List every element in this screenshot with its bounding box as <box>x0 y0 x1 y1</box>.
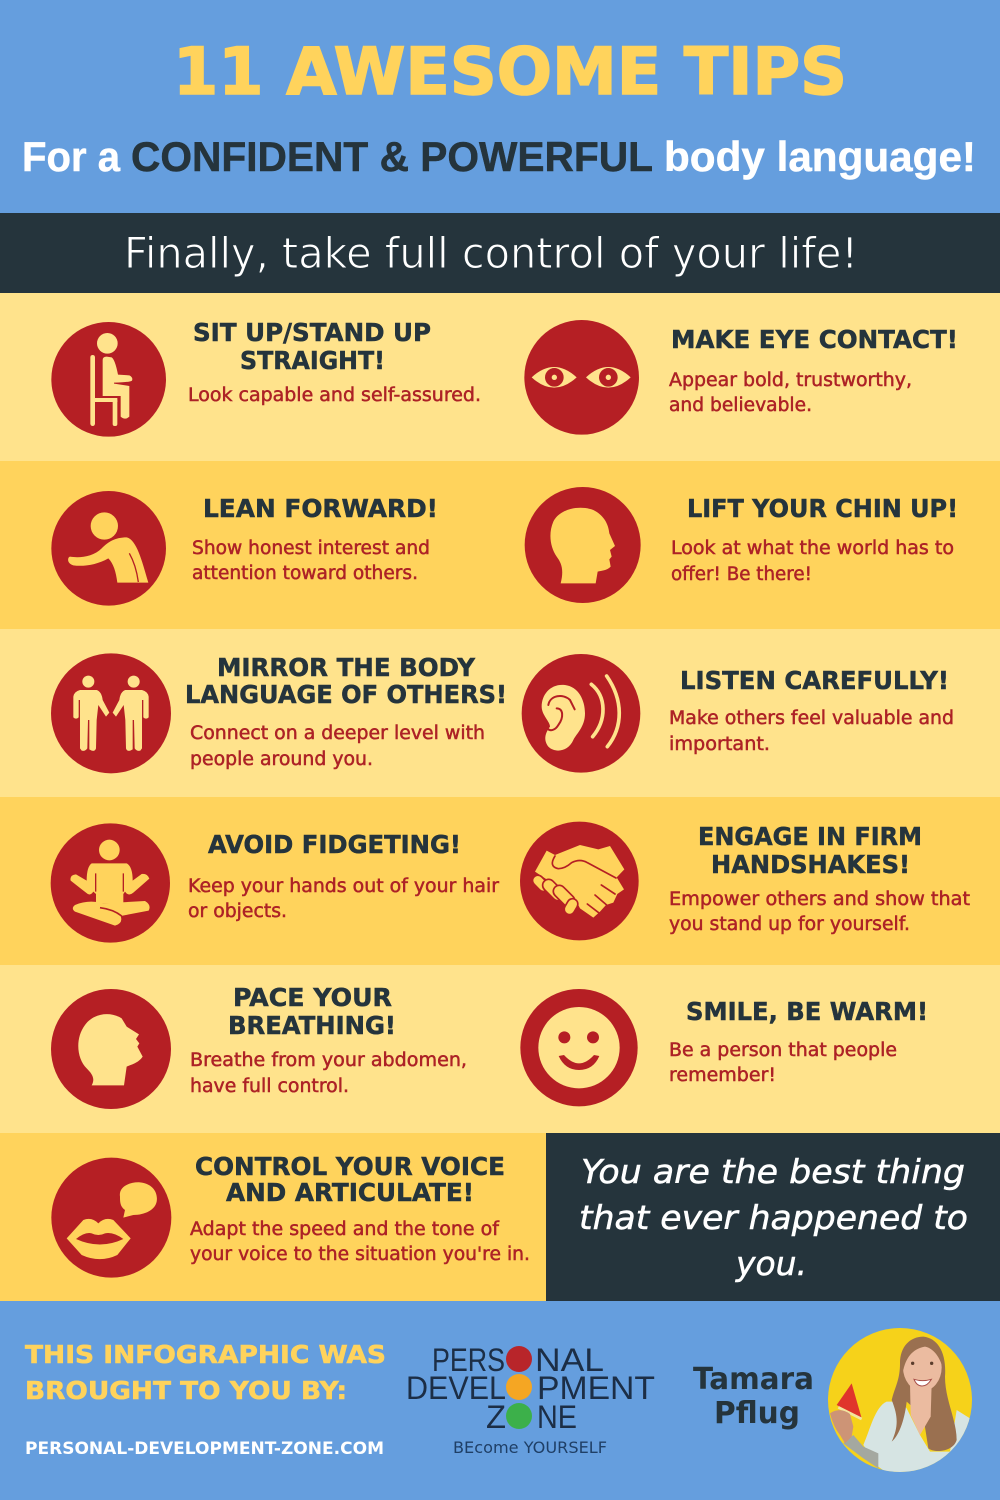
logo: personal development zone: NAL <box>535 1342 604 1378</box>
footer credit: BROUGHT TO YOU BY: <box>25 1376 347 1405</box>
heading: AND ARTICULATE! <box>226 1178 474 1207</box>
text: Be a person that people <box>669 1040 897 1061</box>
text: and believable. <box>669 395 812 416</box>
icon: handshake <box>520 822 639 940</box>
text: offer! Be there! <box>671 564 812 585</box>
text: Adapt the speed and the tone of <box>190 1219 499 1240</box>
text <box>671 538 954 585</box>
icon: lips and speech bubble <box>51 1158 171 1278</box>
heading: LANGUAGE OF OTHERS! <box>185 680 507 709</box>
heading <box>195 1152 505 1207</box>
text: Show honest interest and <box>192 538 430 559</box>
subtitle <box>22 133 976 180</box>
text <box>669 370 912 416</box>
logo: personal development zone <box>406 1342 655 1457</box>
text <box>188 876 499 922</box>
heading: PACE YOUR <box>233 983 392 1012</box>
text: your voice to the situation you're in. <box>190 1244 530 1265</box>
heading: CONTROL YOUR VOICE <box>195 1152 505 1181</box>
heading: MAKE EYE CONTACT! <box>671 325 958 354</box>
tip: avoid fidgeting <box>51 823 499 943</box>
heading: MIRROR THE BODY <box>217 653 476 682</box>
text: Breathe from your abdomen, <box>190 1050 467 1071</box>
title: 11 AWESOME TIPS <box>173 35 847 110</box>
heading: HANDSHAKES! <box>711 850 910 879</box>
text: Connect on a deeper level with <box>190 723 485 744</box>
subtitle: CONFIDENT & POWERFUL <box>131 133 653 180</box>
author name <box>693 1362 814 1431</box>
text <box>190 1050 467 1097</box>
heading: LISTEN CAREFULLY! <box>680 666 949 695</box>
text: Empower others and show that <box>669 889 970 910</box>
text: Appear bold, trustworthy, <box>669 370 912 391</box>
icon: head tilted up <box>51 989 171 1109</box>
tip: firm handshakes <box>520 822 970 940</box>
logo: personal development zone: DEVEL <box>406 1370 506 1406</box>
icon: head profile <box>525 487 641 603</box>
tip: lean forward <box>51 491 438 606</box>
text: Keep your hands out of your hair <box>188 876 499 897</box>
heading: LIFT YOUR CHIN UP! <box>687 494 958 523</box>
portrait <box>827 1327 973 1477</box>
text <box>669 1040 897 1086</box>
logo: personal development zone: Z <box>486 1399 506 1435</box>
text <box>669 708 954 755</box>
tip: lift chin <box>525 487 958 603</box>
heading <box>193 318 431 375</box>
tip: pace breathing <box>51 983 467 1109</box>
tip: smile <box>520 989 928 1106</box>
text: attention toward others. <box>192 563 418 584</box>
tip: eye contact <box>524 320 958 435</box>
text <box>192 538 430 584</box>
text: or objects. <box>188 901 287 922</box>
banner: Finally, take full control of your life! <box>124 229 858 279</box>
text: Look at what the world has to <box>671 538 954 559</box>
logo: personal development zone: PERS <box>432 1342 505 1378</box>
heading: BREATHING! <box>228 1011 396 1040</box>
text <box>190 1219 530 1265</box>
author name: Tamara <box>693 1362 814 1397</box>
text <box>190 723 485 770</box>
icon: seated person <box>51 322 166 437</box>
text <box>669 889 970 935</box>
text: have full control. <box>190 1076 349 1097</box>
banner <box>0 213 1000 293</box>
heading <box>185 653 507 709</box>
text: people around you. <box>190 749 373 770</box>
text: Make others feel valuable and <box>669 708 954 729</box>
subtitle: For a <box>22 133 121 180</box>
tip: control voice <box>51 1152 530 1278</box>
icon: ear <box>522 654 640 773</box>
author name: Pflug <box>714 1396 800 1431</box>
icon: meditating person <box>51 823 170 943</box>
heading: SMILE, BE WARM! <box>686 997 928 1026</box>
heading: STRAIGHT! <box>240 346 385 375</box>
website url: PERSONAL-DEVELOPMENT-ZONE.COM <box>25 1439 384 1458</box>
subtitle: body language! <box>664 133 976 180</box>
text: remember! <box>669 1065 776 1086</box>
text: you stand up for yourself. <box>669 914 910 935</box>
logo: personal development zone: NE <box>537 1399 577 1435</box>
text: important. <box>669 734 770 755</box>
quote panel: You are the best thing <box>581 1152 965 1191</box>
heading: LEAN FORWARD! <box>203 494 438 523</box>
quote panel: that ever happened to <box>579 1198 968 1237</box>
footer credit: THIS INFOGRAPHIC WAS <box>25 1340 386 1369</box>
tip: sit up straight <box>51 318 481 437</box>
heading: AVOID FIDGETING! <box>208 830 461 859</box>
heading <box>698 822 922 879</box>
heading: ENGAGE IN FIRM <box>698 822 922 851</box>
footer credit <box>25 1340 386 1405</box>
icon: eyes <box>524 320 639 435</box>
icon: leaning person <box>51 491 166 606</box>
tip: listen carefully <box>522 654 954 773</box>
icon: smiley <box>520 989 638 1106</box>
quote panel <box>546 1133 1000 1301</box>
heading <box>228 983 396 1040</box>
logo: personal development zone: PMENT <box>537 1370 655 1406</box>
text: Look capable and self-assured. <box>188 385 481 406</box>
heading: SIT UP/STAND UP <box>193 318 431 347</box>
quote panel: you. <box>735 1244 807 1283</box>
icon: two people <box>51 653 171 773</box>
logo: personal development zone: BEcome YOURSELF <box>453 1438 607 1457</box>
tip: mirror body language <box>51 653 507 773</box>
